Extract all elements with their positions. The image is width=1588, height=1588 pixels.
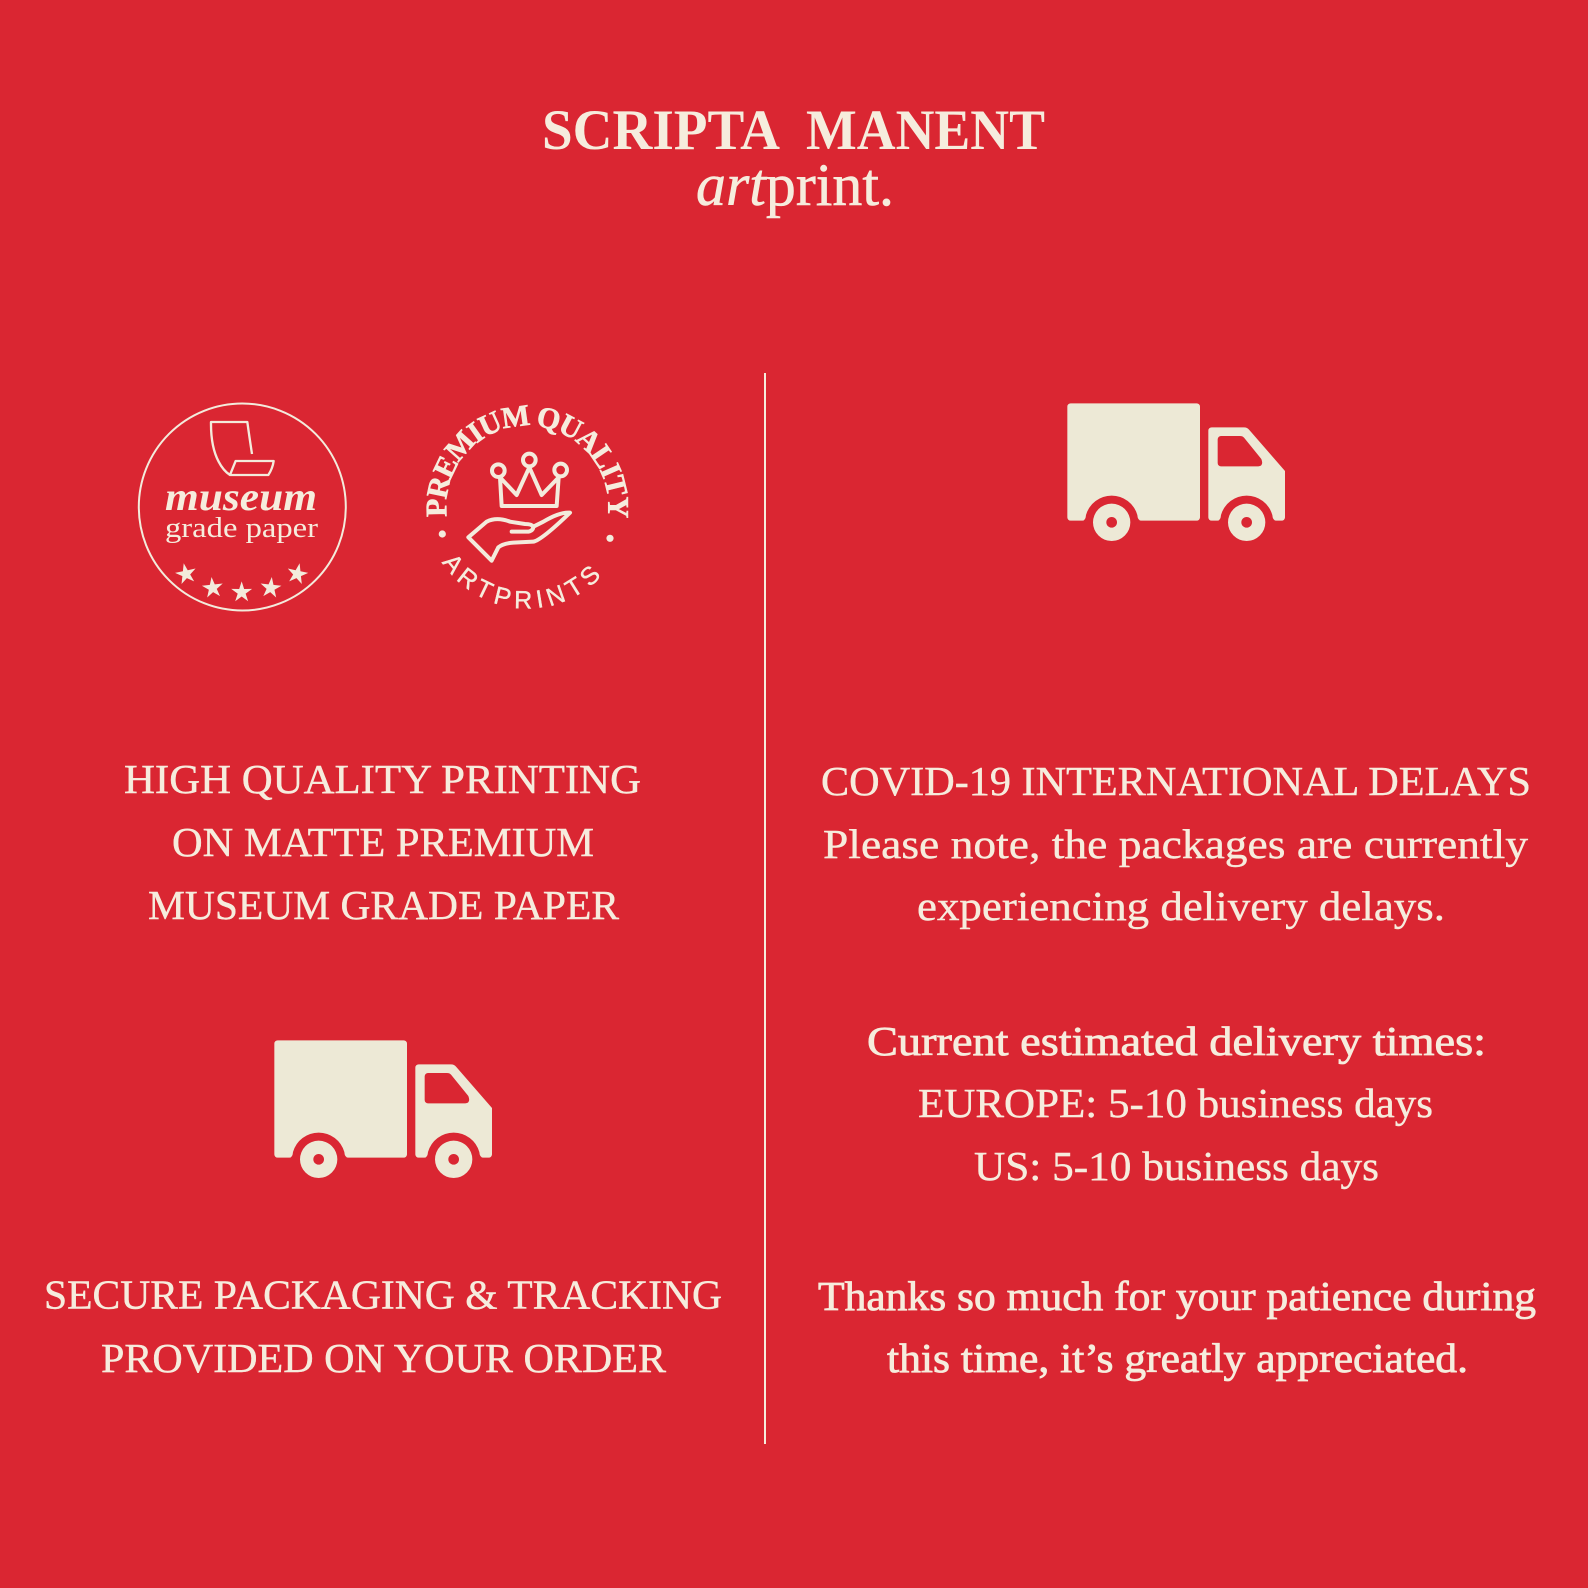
text block: high quality printing: MUSEUM GRADE PAPER <box>148 882 620 928</box>
text block: covid delays notice: Please note, the packages are currently <box>823 821 1529 867</box>
icon: delivery truck left <box>274 1040 492 1178</box>
text block: secure packaging: PROVIDED ON YOUR ORDER <box>101 1335 667 1381</box>
museum script word: museum <box>165 474 317 519</box>
icon: delivery truck right <box>1067 403 1285 541</box>
artprints curved text: ARTPRINTS <box>441 556 600 609</box>
text block: thanks: this time, it’s greatly appreciated. <box>887 1335 1468 1381</box>
premium quality curved text: PREMIUM QUALITY <box>426 404 628 518</box>
text block: delivery times: US: 5-10 business days <box>974 1143 1379 1189</box>
icon: five stars <box>173 561 310 601</box>
text block: covid delays notice: experiencing delivery delays. <box>917 883 1445 929</box>
text block: thanks: Thanks so much for your patience during <box>818 1273 1536 1319</box>
text block: secure packaging: SECURE PACKAGING & TRACKING <box>44 1272 722 1318</box>
title: SCRIPTA <box>542 99 780 162</box>
grade paper text: grade paper <box>165 513 319 544</box>
title <box>542 99 1045 218</box>
badge: museum grade paper <box>139 404 346 610</box>
badge: premium quality <box>426 404 628 609</box>
separator dots <box>439 530 614 542</box>
text block: delivery times <box>867 1018 1486 1189</box>
text block: delivery times: Current estimated delivery times: <box>867 1018 1486 1064</box>
text block: high quality printing: HIGH QUALITY PRINTING <box>124 756 641 802</box>
title: artprint. <box>696 152 894 218</box>
text block: covid delays notice: COVID-19 INTERNATIONAL DELAYS <box>821 758 1531 804</box>
text block: high quality printing: ON MATTE PREMIUM <box>172 819 594 865</box>
text block: thanks <box>818 1273 1536 1381</box>
icon: paper sheet <box>211 422 274 475</box>
text block: covid delays notice <box>821 758 1531 929</box>
text block: delivery times: EUROPE: 5-10 business days <box>918 1080 1433 1126</box>
icon: crown and hand <box>468 454 570 561</box>
text block: secure packaging <box>44 1272 722 1381</box>
title: MANENT <box>806 99 1045 162</box>
text block: high quality printing <box>124 756 641 928</box>
